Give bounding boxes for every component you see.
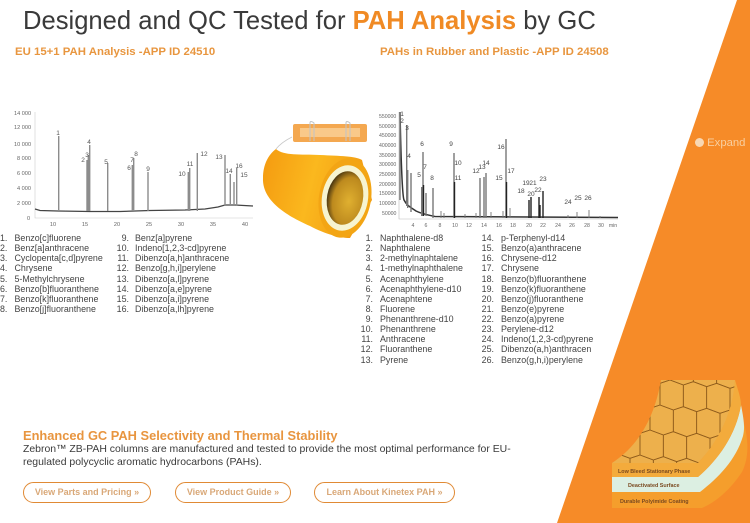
left chromatogram: 20	[114, 222, 120, 228]
right chromatogram: 50000	[382, 211, 397, 217]
compound list: left col 2: Benzo[g,h,i]perylene	[135, 263, 216, 273]
right chromatogram: 2	[400, 118, 404, 125]
left chromatogram: 5	[104, 159, 108, 166]
compound list: right col 2: 15.	[482, 243, 494, 253]
compound list: right col 2: Benzo(k)fluoranthene	[501, 284, 586, 294]
right chromatogram: 18	[510, 223, 516, 229]
right chromatogram: 28	[584, 223, 590, 229]
compound list: left col 2: Dibenzo[a,i]pyrene	[135, 294, 209, 304]
section heading: Enhanced GC PAH Selectivity and Thermal Stability	[23, 428, 338, 443]
right chromatogram: 9	[449, 141, 453, 148]
compound list: left col 1: Benzo[j]fluoranthene	[14, 304, 96, 314]
right chromatogram: 200000	[379, 182, 396, 188]
right chromatogram: 10	[452, 223, 458, 229]
left chromatogram: 1	[56, 130, 60, 137]
compound list: right col 1: 8.	[366, 304, 373, 314]
compound list: left col 2: 15.	[117, 294, 129, 304]
column illustration	[262, 121, 372, 238]
compound list: right col 1: Naphthalene	[380, 243, 430, 253]
compound list: right col 1: Phenanthrene-d10	[380, 314, 454, 324]
button: parts	[23, 482, 151, 503]
compound list: right col 1: 13.	[361, 354, 373, 364]
right chromatogram: 20	[526, 223, 532, 229]
right chromatogram	[379, 111, 618, 229]
left chromatogram: 12 000	[14, 125, 31, 131]
compound list: left col 1: 2.	[0, 243, 7, 253]
right chromatogram: 500000	[379, 124, 396, 130]
left chromatogram: 4	[87, 139, 91, 146]
left chromatogram: 10	[178, 171, 186, 178]
left chromatogram: 0	[27, 216, 30, 222]
right chromatogram: 16	[496, 223, 502, 229]
compound list: left col 1: 6.	[0, 284, 7, 294]
compound list: right col 2: Chrysene	[501, 263, 539, 273]
body text: Zebron™ ZB-PAH columns are manufactured and tested to provide the most optimal performance for EU-	[23, 444, 511, 455]
left chromatogram: 30	[178, 222, 184, 228]
right chromatogram: 5	[417, 172, 421, 179]
compound list: right col 2: Benzo(a)pyrene	[501, 314, 564, 324]
compound list: right col 2: 24.	[482, 334, 494, 344]
compound list: right col 2: Chrysene-d12	[501, 253, 557, 263]
left chromatogram: 3	[85, 152, 89, 159]
right chromatogram: 17	[507, 168, 515, 175]
right chromatogram: 22	[540, 223, 546, 229]
right chromatogram: 15	[495, 175, 503, 182]
compound list: right col 2: 18.	[482, 274, 494, 284]
right chromatogram: 12	[472, 168, 480, 175]
compound list: right col 2: Benzo(e)pyrene	[501, 304, 564, 314]
right chromatogram: 550000	[379, 114, 396, 120]
compound list: right col 1: Naphthalene-d8	[380, 233, 443, 243]
compound list: right col 2: 14.	[482, 233, 494, 243]
right chromatogram: 23	[539, 176, 547, 183]
compound list: left col 1: Cyclopenta[c,d]pyrene	[14, 253, 103, 263]
compound list: right col 2	[482, 233, 593, 365]
right chromatogram: 14	[481, 223, 487, 229]
compound list: right col 2: Benzo(g,h,i)perylene	[501, 354, 583, 364]
compound list: right col 1: Pyrene	[380, 354, 408, 364]
right chromatogram: 150000	[379, 191, 396, 197]
left chromatogram: 9	[146, 166, 150, 173]
right chromatogram: 22	[534, 187, 542, 194]
compound list: left col 1: 1.	[0, 233, 7, 243]
honeycomb surface	[612, 380, 735, 463]
compound list: left col 2: 16.	[117, 304, 129, 314]
compound list: right col 2: Benzo(a)anthracene	[501, 243, 581, 253]
compound list: right col 1: 1-methylnaphthalene	[380, 263, 463, 273]
right chromatogram: 10	[454, 160, 462, 167]
layer labels	[618, 469, 690, 505]
right chromatogram: 1	[400, 111, 404, 118]
left chromatogram: 10 000	[14, 142, 31, 148]
compound list: left col 2: 14.	[117, 284, 129, 294]
compound list: right col 2: 17.	[482, 263, 494, 273]
compound list: right col 1: 9.	[366, 314, 373, 324]
disc	[293, 122, 367, 142]
layered surface illustration	[612, 380, 748, 508]
left chromatogram: 12	[200, 151, 208, 158]
right chromatogram: 12	[466, 223, 472, 229]
left chromatogram: 25	[146, 222, 152, 228]
right chromatogram: 11	[455, 175, 462, 182]
button: parts: View Parts and Pricing »	[35, 487, 139, 497]
body text	[23, 444, 511, 468]
heading: left chart: EU 15+1 PAH Analysis -APP ID 24510	[15, 46, 215, 58]
compound list: left col 2: 13.	[117, 274, 129, 284]
compound list: left col 1: Benz[a]anthracene	[14, 243, 89, 253]
compound list: right col 1: 5.	[366, 274, 373, 284]
compound list: right col 2: 22.	[482, 314, 494, 324]
bottom coating side and front	[612, 420, 747, 508]
green deactivated layer	[612, 405, 744, 492]
right chromatogram: 400000	[379, 143, 396, 149]
compound list: right col 2: 20.	[482, 294, 494, 304]
left chromatogram: 35	[210, 222, 216, 228]
compound list: right col 1: 2-methylnaphtalene	[380, 253, 458, 263]
right chromatogram: 26	[584, 195, 592, 202]
left chromatogram: 4 000	[17, 186, 31, 192]
compound list: left col 2: Benz[a]pyrene	[135, 233, 192, 243]
compound list: right col 2: Dibenzo(a,h)anthracen	[501, 344, 591, 354]
right chromatogram: 19	[522, 180, 530, 187]
right chromatogram: 6	[420, 141, 424, 148]
left chromatogram: 6 000	[17, 171, 31, 177]
left chromatogram: 14	[225, 168, 233, 175]
compound list: right col 1: Acenaphtene	[380, 294, 432, 304]
right chromatogram: 4	[412, 223, 415, 229]
compound list: left col 2: 11.	[117, 253, 129, 263]
compound list: left col 2: Indeno[1,2,3-cd]pyrene	[135, 243, 226, 253]
compound list: right col 1: 2.	[366, 243, 373, 253]
compound list: right col 2: Perylene-d12	[501, 324, 554, 334]
right chromatogram: 16	[497, 144, 505, 151]
left chromatogram: 15	[240, 172, 248, 179]
right chromatogram: 26	[569, 223, 575, 229]
compound list: right col 1: 7.	[366, 294, 373, 304]
compound list: right col 2: p-Terphenyl-d14	[501, 233, 565, 243]
tube	[263, 149, 372, 238]
compound list: right col 1	[361, 233, 463, 365]
compound list: right col 1: 1.	[366, 233, 373, 243]
left chromatogram: 16	[235, 163, 243, 170]
left chromatogram: 40	[242, 222, 248, 228]
compound list: left col 2	[117, 233, 229, 314]
compound list: right col 2: 19.	[482, 284, 494, 294]
compound list: right col 2: 23.	[482, 324, 494, 334]
compound list: left col 2: 12.	[117, 263, 129, 273]
compound list: right col 2: 16.	[482, 253, 494, 263]
right chromatogram: 24	[564, 199, 572, 206]
right chromatogram: 6	[425, 223, 428, 229]
yellow stationary layer	[612, 380, 741, 477]
left chromatogram: 2 000	[17, 201, 31, 207]
right chromatogram: 14	[482, 160, 490, 167]
compound list: left col 2: Dibenzo[a,h]anthracene	[135, 253, 229, 263]
compound list: left col 1: Benzo[b]fluoranthene	[14, 284, 99, 294]
left chromatogram: 8	[134, 151, 138, 158]
right chromatogram: 300000	[379, 162, 396, 168]
compound list: right col 1: 4.	[366, 263, 373, 273]
compound list: right col 1: Acenaphthylene	[380, 274, 444, 284]
button: kinetex: Learn About Kinetex PAH »	[326, 487, 442, 497]
right chromatogram: 24	[555, 223, 561, 229]
right chromatogram: 450000	[379, 133, 396, 139]
compound list: left col 2: Dibenzo[a,l]pyrene	[135, 274, 209, 284]
left chromatogram: 7	[130, 157, 134, 164]
compound list: left col 1: 5.	[0, 274, 7, 284]
compound list: left col 1	[0, 233, 103, 314]
right chromatogram: min	[609, 223, 617, 229]
compound list: right col 2: 26.	[482, 354, 494, 364]
compound list: left col 2: Dibenzo[a,lh]pyrene	[135, 304, 214, 314]
button: kinetex	[314, 482, 455, 503]
right chromatogram: 100000	[379, 201, 396, 207]
right chromatogram: 25	[574, 195, 582, 202]
layer labels: Deactivated Surface	[628, 483, 680, 489]
compound list: right col 1: 3.	[366, 253, 373, 263]
right chromatogram: 30	[598, 223, 604, 229]
compound list: right col 1: 11.	[361, 334, 373, 344]
expand control: Expand	[707, 137, 745, 149]
right chromatogram: 8	[430, 175, 434, 182]
compound list: right col 2: 25.	[482, 344, 494, 354]
compound list: right col 2: Benzo(j)fluoranthene	[501, 294, 583, 304]
layer labels: Durable Polyimide Coating	[620, 499, 689, 505]
left chromatogram: 8 000	[17, 156, 31, 162]
button: guide: View Product Guide »	[187, 487, 279, 497]
body text: regulated polycyclic aromatic hydrocarbons (PAHs).	[23, 457, 262, 468]
right chromatogram: 3	[405, 125, 409, 132]
compound list: left col 1: Benzo[k]fluoranthene	[14, 294, 98, 304]
left chromatogram: 10	[50, 222, 56, 228]
compound list: left col 1: 4.	[0, 263, 7, 273]
compound list: left col 1: 7.	[0, 294, 7, 304]
right chromatogram: 18	[517, 188, 525, 195]
right chromatogram: 21	[529, 180, 537, 187]
left chromatogram: 15	[82, 222, 88, 228]
right chromatogram: 8	[439, 223, 442, 229]
compound list: right col 1: Acenaphthylene-d10	[380, 284, 461, 294]
left chromatogram: 6	[127, 165, 131, 172]
button: guide	[175, 482, 291, 503]
left chromatogram: 13	[215, 154, 223, 161]
right chromatogram: 7	[423, 164, 427, 171]
compound list: left col 1: 3.	[0, 253, 7, 263]
right chromatogram: 350000	[379, 153, 396, 159]
layer labels: Low Bleed Stationary Phase	[618, 469, 690, 475]
compound list: left col 1: Chrysene	[14, 263, 52, 273]
compound list: right col 1: Fluoranthene	[380, 344, 432, 354]
left chromatogram	[14, 111, 253, 228]
compound list: right col 2: 21.	[482, 304, 494, 314]
right chromatogram: 250000	[379, 172, 396, 178]
compound list: right col 2: Indeno(1,2,3-cd)pyrene	[501, 334, 593, 344]
compound list: right col 2: Benzo(b)fluoranthene	[501, 274, 586, 284]
compound list: right col 1: Phenanthrene	[380, 324, 436, 334]
compound list: right col 1: 12.	[361, 344, 373, 354]
right chromatogram: 13	[478, 164, 486, 171]
left chromatogram: 11	[187, 161, 194, 168]
left chromatogram: 2	[81, 157, 85, 164]
compound list: left col 1: 5-Methylchrysene	[14, 274, 85, 284]
left chromatogram: 14 000	[14, 111, 31, 117]
compound list: left col 2: Dibenzo[a,e]pyrene	[135, 284, 212, 294]
compound list: right col 1: 10.	[361, 324, 373, 334]
compound list: left col 2: 10.	[117, 243, 129, 253]
heading: right chart: PAHs in Rubber and Plastic -APP ID 24508	[380, 46, 609, 58]
title: Designed and QC Tested for PAH Analysis by GC	[23, 7, 596, 35]
compound list: right col 1: Anthracene	[380, 334, 425, 344]
compound list: left col 1: 8.	[0, 304, 7, 314]
compound list: right col 1: Fluorene	[380, 304, 415, 314]
right chromatogram: 4	[407, 153, 411, 160]
compound list: right col 1: 6.	[366, 284, 373, 294]
right chromatogram: 20	[527, 191, 535, 198]
compound list: left col 2: 9.	[122, 233, 129, 243]
compound list: left col 1: Benzo[c]fluorene	[14, 233, 81, 243]
